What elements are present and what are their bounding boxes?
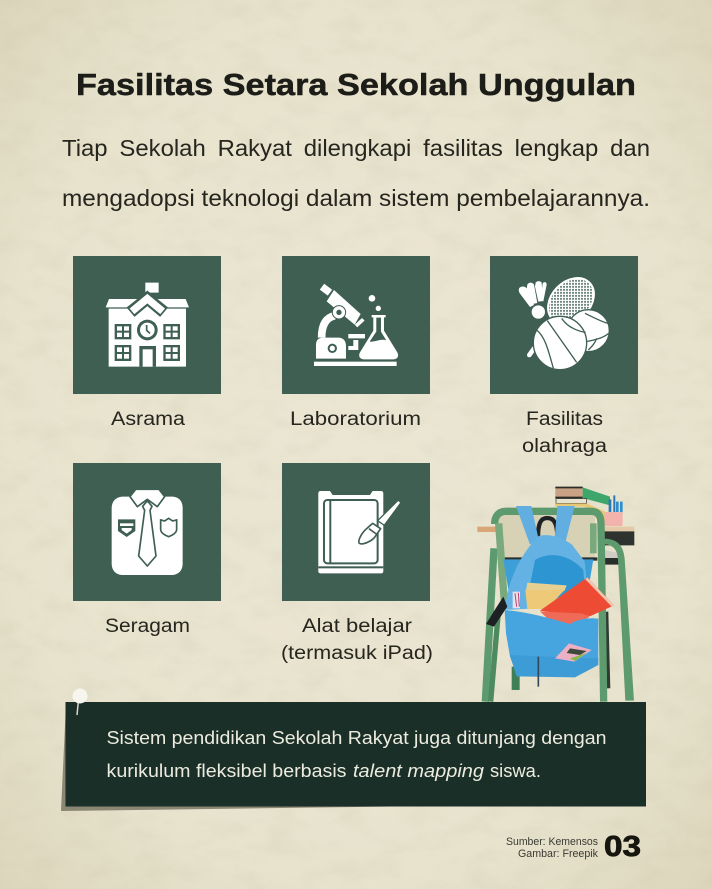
backpack bbox=[486, 506, 614, 687]
card: Laboratorium bbox=[282, 256, 430, 394]
intro paragraph bbox=[62, 135, 650, 211]
books and pencil cup bbox=[555, 487, 623, 527]
callout text: Sistem pendidikan Sekolah Rakyat juga ditunjang dengan bbox=[106, 728, 606, 748]
page number: 03 bbox=[604, 831, 641, 863]
label: Asrama: Asrama bbox=[111, 409, 185, 430]
icon: tablet and stylus bbox=[318, 491, 401, 573]
source credits bbox=[506, 836, 598, 860]
icon: school building bbox=[106, 283, 189, 367]
callout text: talent mapping bbox=[353, 761, 484, 781]
label: Fasilitas olahraga bbox=[522, 409, 607, 457]
card: Asrama bbox=[73, 256, 221, 394]
card: Fasilitas olahraga bbox=[490, 256, 638, 394]
icon: microscope and flask bbox=[314, 287, 398, 366]
source credits: Gambar: Freepik bbox=[518, 848, 598, 860]
icon: white push pin bbox=[72, 688, 88, 715]
icon: sports equipment bbox=[519, 269, 609, 370]
callout text: kurikulum fleksibel berbasis bbox=[106, 761, 346, 781]
callout text: siswa. bbox=[490, 761, 541, 781]
card: Seragam bbox=[73, 463, 221, 601]
books inside bbox=[526, 583, 567, 591]
illustration: backpack on school chair and desk bbox=[477, 487, 634, 702]
label: Alat belajar: Alat belajar bbox=[302, 616, 413, 637]
lower pocket bbox=[505, 610, 598, 676]
label: Alat belajar: (termasuk iPad) bbox=[281, 643, 433, 664]
label: Laboratorium: Laboratorium bbox=[290, 409, 421, 430]
label: Seragam: Seragam bbox=[105, 616, 190, 637]
icon: uniform shirt and tie bbox=[112, 489, 183, 575]
label: Fasilitas olahraga: Fasilitas bbox=[526, 409, 603, 430]
chair frame bbox=[485, 511, 609, 702]
intro paragraph: Tiap Sekolah Rakyat dilengkapi fasilitas lengkap dan bbox=[62, 135, 650, 161]
label: Fasilitas olahraga: olahraga bbox=[522, 436, 607, 457]
desk bbox=[477, 527, 634, 701]
intro paragraph: mengadopsi teknologi dalam sistem pembelajarannya. bbox=[62, 185, 650, 211]
callout panel bbox=[61, 702, 646, 811]
title: Fasilitas Setara Sekolah Unggulan bbox=[76, 67, 636, 102]
label: Alat belajar bbox=[281, 616, 433, 664]
source credits: Sumber: Kemensos bbox=[506, 836, 598, 848]
callout text bbox=[106, 728, 606, 781]
card: Alat belajar bbox=[282, 463, 430, 601]
